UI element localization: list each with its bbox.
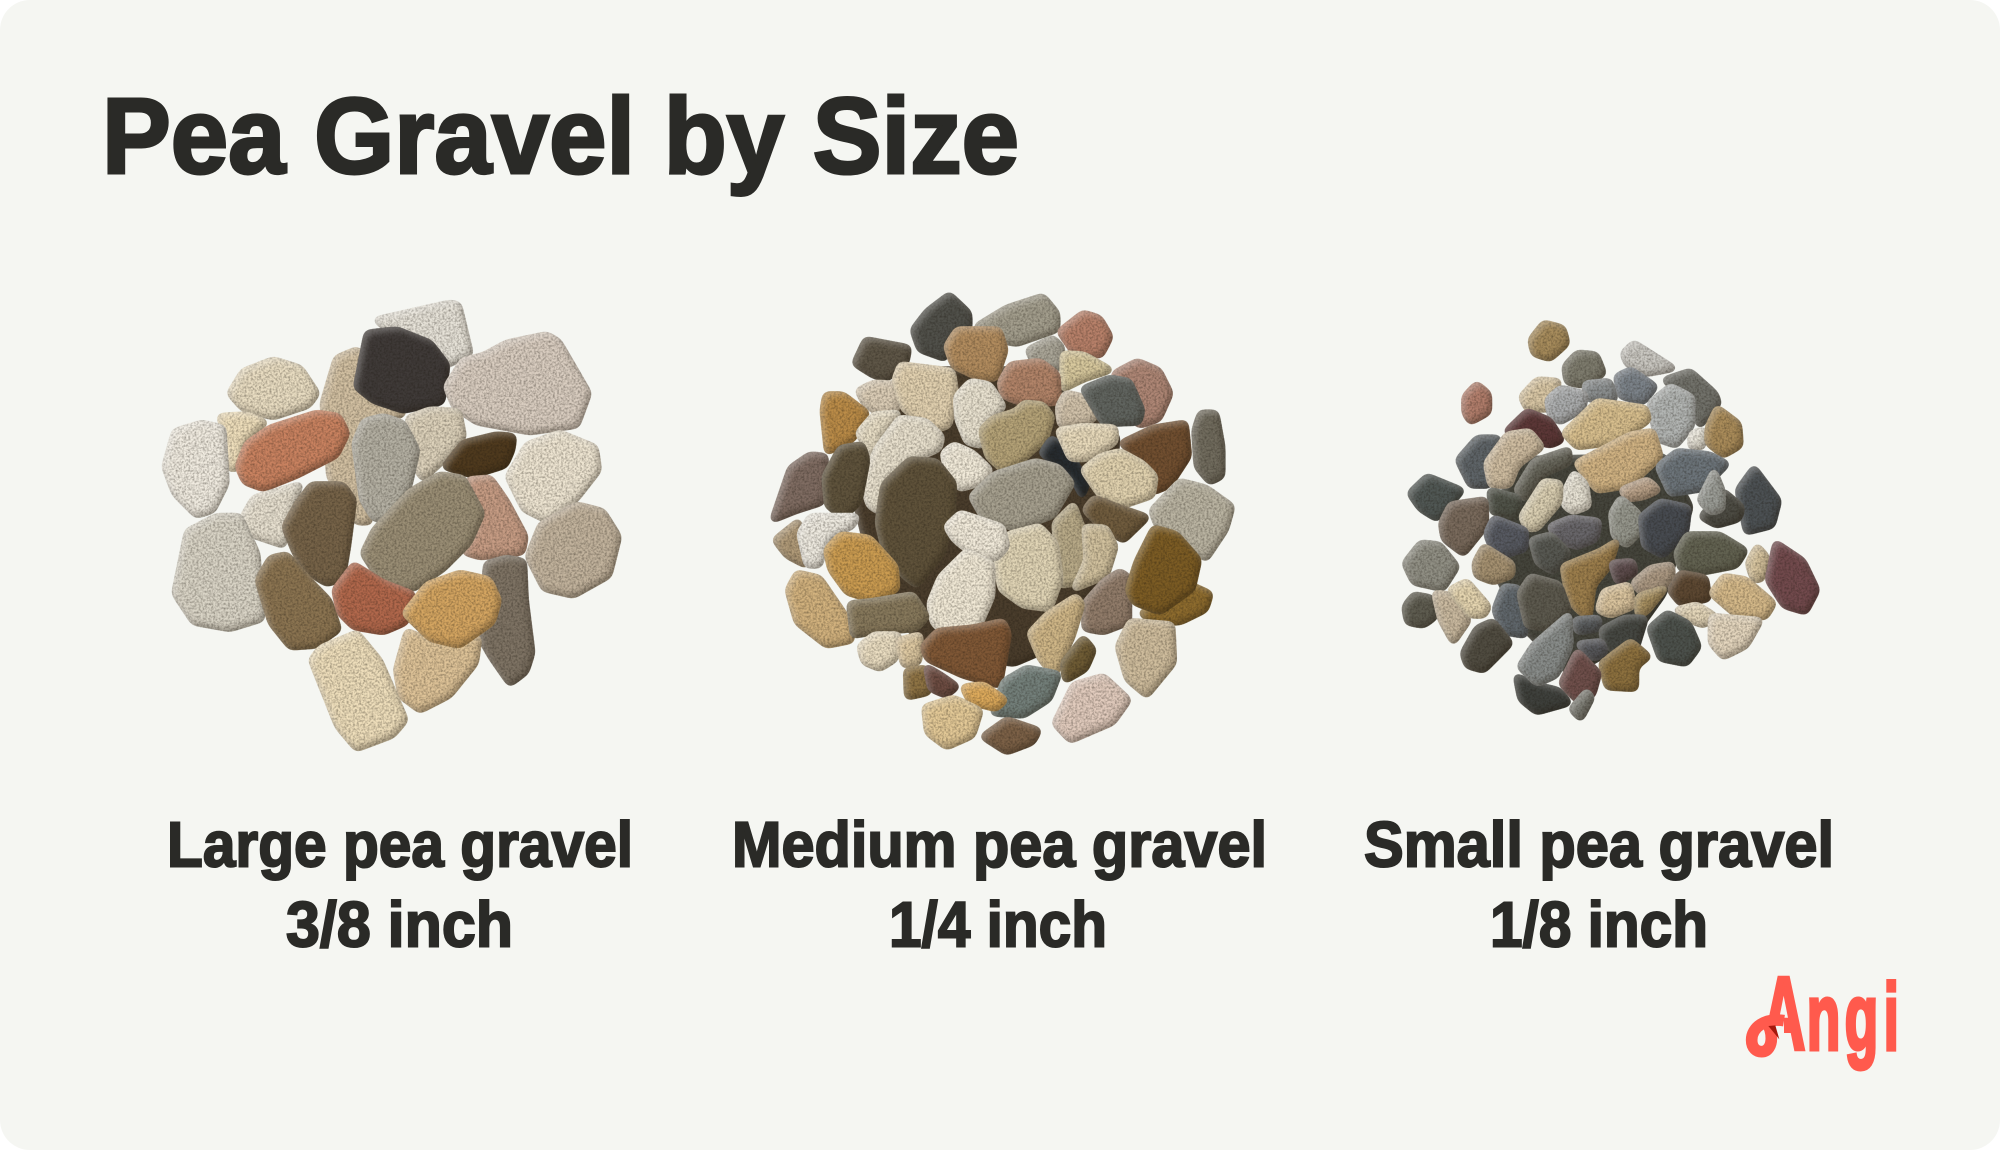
logo: Angi: g	[1845, 965, 1878, 1070]
logo: Angi: i	[1884, 965, 1899, 1070]
logo: Angi: A	[1762, 956, 1805, 1073]
image: small pea gravel pile	[1405, 323, 1817, 718]
label: large pea gravel: Large pea gravel	[167, 808, 633, 880]
label: medium pea gravel: Medium pea gravel	[732, 808, 1267, 880]
logo: Angi	[1746, 976, 1896, 1072]
logo: Angi: n	[1807, 965, 1840, 1070]
label: small pea gravel: Small pea gravel	[1364, 808, 1834, 880]
label: small pea gravel	[1364, 808, 1834, 960]
image: medium pea gravel pile	[773, 295, 1232, 752]
image: large pea gravel pile	[165, 303, 618, 748]
label: medium pea gravel	[732, 808, 1267, 960]
label: medium pea gravel: 1/4 inch	[889, 888, 1107, 960]
label: large pea gravel: 3/8 inch	[286, 888, 513, 960]
label: large pea gravel	[167, 808, 633, 960]
label: small pea gravel: 1/8 inch	[1490, 888, 1708, 960]
title: Pea Gravel by Size	[102, 75, 1019, 196]
